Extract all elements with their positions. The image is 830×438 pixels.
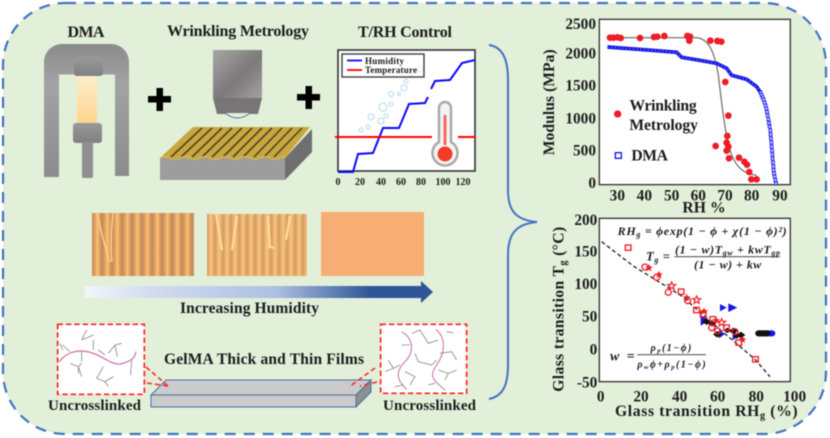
micrograph 2: wrinkles — [207, 214, 307, 276]
chart: T/RH control — [335, 50, 476, 188]
formula Tg: gw — [722, 248, 733, 257]
x tick labels: 60 — [710, 389, 726, 406]
x tick labels — [336, 177, 470, 188]
y axis label: g — [558, 260, 569, 266]
formula w: (1−ϕ) — [676, 359, 706, 370]
y axis label: Glass transition T — [550, 266, 567, 392]
x axis label: g — [760, 411, 766, 422]
x tick labels: 120 — [456, 177, 470, 188]
y tick labels — [574, 212, 598, 392]
y tick labels: 1500 — [565, 78, 596, 95]
y tick labels — [565, 16, 596, 192]
arrow: increasing humidity — [85, 281, 433, 303]
chart: T/RH control: Temperature — [365, 65, 417, 75]
formula Tg: (1 − w)T — [675, 242, 722, 256]
y tick labels: 150 — [574, 244, 598, 261]
formula w: w — [644, 364, 649, 371]
y tick labels: 500 — [573, 143, 596, 160]
x tick labels — [597, 389, 806, 406]
x tick labels: 30 — [610, 188, 625, 205]
heading: T/RH Control: T/RH Control — [358, 24, 453, 41]
formula Tg: T — [646, 250, 654, 264]
x tick labels: 90 — [772, 188, 788, 205]
x tick labels: 50 — [664, 188, 680, 205]
humidity curve — [338, 97, 428, 172]
brace connecting panels — [489, 45, 537, 399]
formula RHg: g — [635, 230, 640, 239]
x tick labels: 40 — [376, 177, 386, 188]
formula Tg: = — [659, 250, 670, 264]
formula w — [610, 343, 706, 371]
y tick labels: 200 — [574, 212, 598, 229]
micrograph 1: wrinkles — [92, 213, 194, 276]
y tick labels: 1000 — [565, 110, 596, 127]
formula w: ρ — [637, 359, 642, 370]
red open stars — [668, 282, 726, 326]
y tick labels: -50 — [577, 375, 598, 392]
x tick labels: 60 — [691, 188, 706, 205]
label: Uncrosslinked left: Uncrosslinked — [48, 398, 142, 414]
formula Tg: gp — [770, 248, 780, 257]
legend: DMA — [631, 147, 669, 164]
x tick labels: 60 — [396, 177, 406, 188]
label: GelMA Thick and Thin Films: GelMA Thick and Thin Films — [164, 351, 364, 368]
x tick labels: 20 — [633, 389, 649, 406]
inset: left uncrosslinked molecule — [58, 324, 144, 394]
x axis label: Glass transition RH — [615, 403, 759, 420]
y tick labels: 50 — [582, 309, 598, 326]
callout lines to film — [146, 367, 377, 387]
legend: Wrinkling — [629, 98, 697, 115]
formula w: ρ — [651, 343, 656, 354]
x tick labels — [610, 188, 788, 205]
x tick labels: 40 — [637, 188, 652, 205]
x tick labels: 80 — [416, 177, 426, 188]
legend — [614, 98, 698, 164]
y tick labels: 100 — [574, 276, 598, 293]
x tick labels: 80 — [749, 389, 764, 406]
x tick labels: 40 — [672, 389, 688, 406]
fit curve wrinkling — [607, 38, 757, 175]
x tick labels: 80 — [744, 188, 760, 205]
y tick labels: 0 — [588, 175, 596, 192]
y axis label: (°C) — [550, 227, 567, 260]
heading: DMA: DMA — [68, 24, 105, 41]
legend: Metrology — [629, 117, 698, 134]
formula w: ϕ+ρ — [650, 359, 670, 370]
x tick labels: 20 — [355, 177, 365, 188]
micrograph 3: flat film — [321, 212, 424, 276]
formula w: p — [670, 364, 675, 371]
formula Tg — [646, 242, 780, 271]
inset: right uncrosslinked molecule — [381, 324, 467, 393]
temperature line — [335, 136, 476, 138]
formula Tg: (1 − w) + kw — [694, 257, 762, 271]
DMA data points — [761, 93, 776, 183]
red filled stars — [645, 264, 747, 343]
formula RHg: RH — [618, 224, 636, 238]
x tick labels: 100 — [783, 389, 806, 406]
y axis label: Modulus (MPa) — [541, 49, 558, 155]
DMA data band — [607, 47, 761, 93]
thermometer — [432, 102, 458, 165]
formula w: (1−ϕ) — [662, 343, 691, 354]
icon: microscope objective over wrinkled film — [160, 50, 312, 180]
red circles — [642, 264, 738, 335]
label: Uncrosslinked right: Uncrosslinked — [383, 398, 477, 414]
label: Increasing Humidity: Increasing Humidity — [180, 300, 319, 317]
formula RHg: = ϕexp(1 − ϕ + χ(1 − ϕ)²) — [641, 224, 787, 238]
chart: modulus vs RH — [541, 16, 790, 217]
plus sign 2 — [297, 86, 320, 109]
x tick labels: 100 — [436, 177, 450, 188]
x axis label: RH % — [682, 200, 726, 217]
formula Tg: g — [653, 256, 658, 265]
dashed fit line — [602, 242, 770, 377]
film bar — [151, 380, 371, 407]
chart: glass transition Tg vs RHg — [550, 212, 806, 422]
bubbles — [359, 66, 423, 132]
wrinkling data points — [607, 33, 760, 183]
y tick labels: 2500 — [565, 16, 596, 33]
icon: DMA tensile tester — [44, 44, 129, 178]
black and blue data — [701, 303, 772, 340]
y tick labels: 2000 — [565, 45, 596, 62]
formula w: p — [656, 348, 661, 355]
legend — [342, 54, 424, 77]
plus sign 1 — [148, 88, 171, 111]
x tick labels: 0 — [336, 177, 340, 188]
chart: T/RH control: Humidity — [365, 56, 404, 66]
x axis label: (%) — [766, 403, 798, 420]
x tick labels: 0 — [597, 389, 605, 406]
y tick labels: 0 — [590, 341, 598, 358]
red squares — [625, 245, 758, 362]
x tick labels: 70 — [717, 188, 733, 205]
formula w: w = — [610, 349, 635, 364]
formula Tg: + kwT — [733, 242, 771, 256]
heading: Wrinkling Metrology: Wrinkling Metrology — [167, 23, 309, 40]
